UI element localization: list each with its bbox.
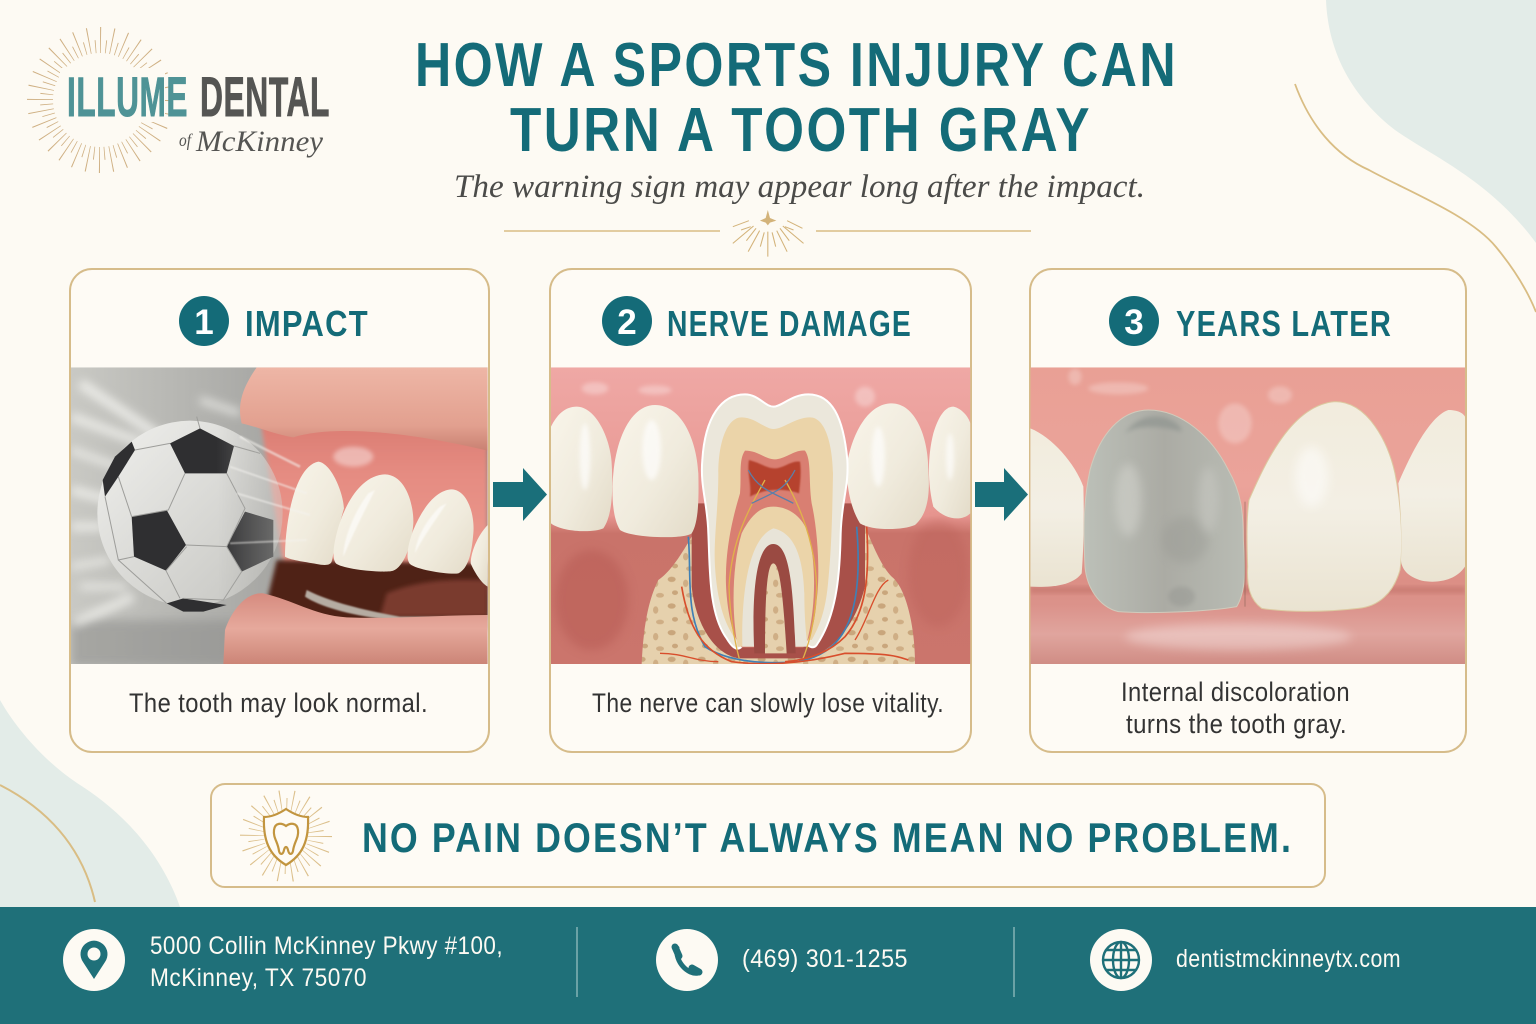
- logo: [40, 40, 330, 160]
- subtitle: The warning sign may appear long after the impact.: [454, 169, 1145, 205]
- footer contact bar: [0, 907, 1536, 1024]
- icon: location pin: [63, 929, 125, 991]
- step 2 number badge: 2: [617, 303, 637, 342]
- step 3 caption: [1121, 677, 1350, 739]
- image: gray tooth next to healthy tooth: [1030, 367, 1465, 664]
- title: TURN A TOOTH GRAY: [510, 96, 1092, 165]
- decorative blob: bottom left: [0, 700, 180, 907]
- title: HOW A SPORTS INJURY CAN: [415, 31, 1178, 100]
- step 1 number badge: 1: [194, 303, 214, 342]
- logo wordmark: of: [179, 130, 194, 150]
- icon: phone: [656, 929, 718, 991]
- decorative gold curve: top right: [1295, 84, 1536, 312]
- icon: tooth shield with sunburst: [252, 802, 320, 870]
- step 1 heading: IMPACT: [245, 303, 369, 344]
- step 1 caption: The tooth may look normal.: [129, 688, 428, 718]
- arrow 2 to 3: [975, 468, 1028, 521]
- nerves and blood vessels: [660, 470, 908, 664]
- banner message: NO PAIN DOESN’T ALWAYS MEAN NO PROBLEM.: [362, 814, 1293, 861]
- decorative gold curve: bottom left: [0, 785, 95, 902]
- step 2 heading: NERVE DAMAGE: [667, 303, 912, 344]
- logo wordmark: McKinney: [195, 125, 324, 158]
- decorative blob: top right: [1326, 0, 1536, 243]
- step 3 number badge: 3: [1124, 303, 1144, 342]
- step 3 number badge: [1109, 296, 1159, 346]
- step 2 caption: The nerve can slowly lose vitality.: [592, 688, 944, 718]
- banner outline: [211, 784, 1325, 887]
- card outline: [550, 269, 971, 752]
- icon: globe: [1090, 929, 1152, 991]
- step 3 caption: Internal discoloration: [1121, 677, 1350, 707]
- step 1 number badge: [179, 296, 229, 346]
- panel: step 2 nerve damage: [550, 269, 971, 752]
- address: [150, 932, 503, 992]
- step 3 caption: turns the tooth gray.: [1126, 709, 1347, 739]
- card outline: [70, 269, 489, 752]
- website: dentistmckinneytx.com: [1176, 945, 1401, 973]
- arrow 1 to 2: [493, 468, 547, 521]
- panel: step 1 impact: [70, 269, 489, 752]
- logo wordmark: ILLUME: [67, 65, 188, 128]
- address: McKinney, TX 75070: [150, 964, 367, 992]
- panel: step 3 years later: [1030, 269, 1466, 752]
- header divider with sunburst: [504, 210, 1031, 257]
- callout banner: [211, 784, 1325, 887]
- tooth anatomy: [702, 394, 848, 653]
- logo wordmark: [67, 65, 330, 158]
- phone number: (469) 301-1255: [742, 945, 908, 973]
- step 3 heading: YEARS LATER: [1176, 303, 1392, 344]
- step 2 number badge: [602, 296, 652, 346]
- address: 5000 Collin McKinney Pkwy #100,: [150, 932, 503, 960]
- card outline: [1030, 269, 1466, 752]
- image: tooth cross-section: [551, 367, 970, 664]
- logo wordmark: DENTAL: [200, 65, 330, 128]
- image: soccer ball hitting teeth: [71, 367, 488, 667]
- logo sunburst: [40, 40, 165, 160]
- title: [415, 31, 1178, 165]
